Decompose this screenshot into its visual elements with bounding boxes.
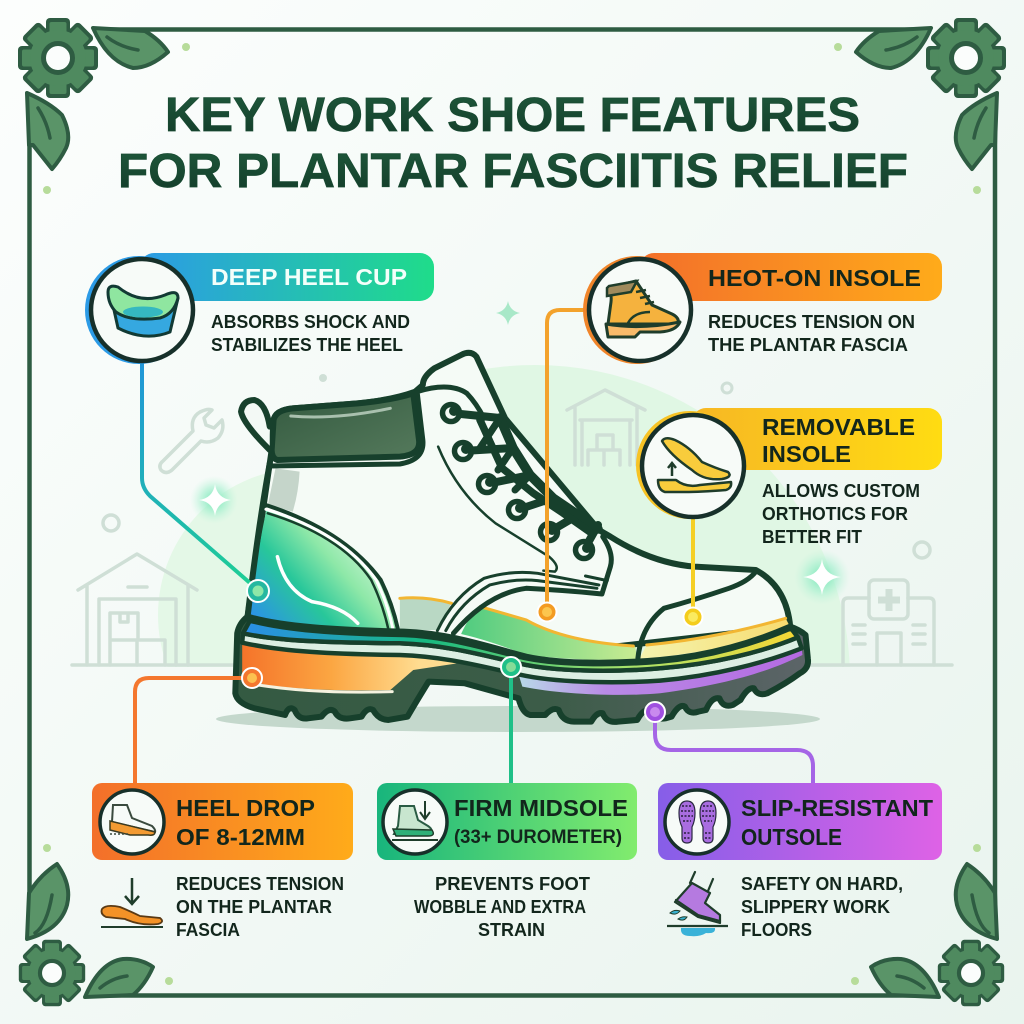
description: heel drop: ON THE PLANTAR bbox=[176, 897, 332, 917]
callout: slip-resistant outsole: OUTSOLE bbox=[741, 824, 842, 850]
eyelets bbox=[442, 404, 592, 558]
purple sole stripe bbox=[519, 648, 802, 695]
title bbox=[118, 89, 908, 198]
callout: removable insole: BETTER FIT bbox=[762, 527, 862, 547]
boot illustration bbox=[235, 353, 808, 722]
callout: removable insole: ORTHOTICS FOR bbox=[762, 504, 908, 524]
description: heel drop: FASCIA bbox=[176, 920, 240, 940]
sparkles bbox=[190, 301, 850, 605]
description: firm midsole: STRAIN bbox=[478, 920, 545, 940]
icon: hospital bbox=[843, 580, 934, 665]
callout: slip-resistant outsole bbox=[658, 783, 942, 860]
description: slip-resistant outsole: SAFETY ON HARD, bbox=[741, 874, 903, 894]
heel wedge orange bbox=[242, 643, 469, 690]
midfoot coloured panels bbox=[400, 598, 452, 630]
callout: heel drop: OF 8-12MM bbox=[176, 824, 305, 850]
connector: outsole bbox=[655, 712, 813, 784]
title: KEY WORK SHOE FEATURES bbox=[165, 89, 860, 142]
coloured midsole band bbox=[243, 621, 798, 671]
collar bbox=[272, 393, 419, 460]
icon: wrench bbox=[160, 409, 223, 472]
callout: deep heel cup: STABILIZES THE HEEL bbox=[211, 335, 403, 355]
grey lining strip bbox=[268, 468, 300, 512]
connector: firm midsole bbox=[509, 667, 513, 784]
callout: firm midsole: (33+ DUROMETER) bbox=[454, 827, 622, 848]
pull tab bbox=[241, 400, 270, 450]
description: slip-resistant outsole: FLOORS bbox=[741, 920, 812, 940]
callout: slip-resistant outsole: SLIP-RESISTANT bbox=[741, 795, 933, 821]
connector: heel drop bbox=[135, 678, 252, 784]
callout: heot-on insole: REDUCES TENSION ON bbox=[708, 312, 915, 332]
corner ornament: bottom-left gear bbox=[19, 940, 85, 1006]
corner ornament: bottom-right gear bbox=[938, 940, 1004, 1006]
inner panel lines bbox=[438, 447, 557, 572]
icon: heel cup bbox=[91, 259, 193, 361]
ground shadow under boot bbox=[216, 706, 820, 732]
description: firm midsole bbox=[414, 874, 590, 940]
callout: removable insole: ALLOWS CUSTOM bbox=[762, 481, 920, 501]
connector: removable insole bbox=[691, 518, 695, 617]
background glow: green blobs behind boot bbox=[158, 365, 850, 663]
icon: warehouse center bbox=[567, 390, 645, 465]
corner ornament: top-right gear bbox=[926, 18, 1006, 98]
callout: heot-on insole: THE PLANTAR FASCIA bbox=[708, 335, 908, 355]
icon: firm midsole shoe bbox=[383, 790, 447, 854]
white welt band bbox=[242, 633, 802, 682]
connector: heel-on insole bbox=[547, 310, 592, 612]
ground lines bbox=[72, 663, 952, 667]
icon: insole lift bbox=[642, 415, 744, 517]
laces bbox=[451, 413, 598, 550]
toe cap bbox=[638, 572, 756, 658]
callout: heot-on insole: HEOT-ON INSOLE bbox=[708, 265, 921, 291]
callout: removable insole: INSOLE bbox=[762, 441, 851, 467]
icon: warehouse left bbox=[78, 554, 197, 665]
description: heel drop: REDUCES TENSION bbox=[176, 874, 344, 894]
outsole bbox=[235, 617, 808, 722]
connector dots bbox=[242, 580, 702, 722]
callout: heel drop bbox=[92, 783, 353, 860]
callout: heot-on insole bbox=[583, 253, 942, 364]
callout: firm midsole: FIRM MIDSOLE bbox=[454, 795, 628, 821]
description: slip-resistant outsole bbox=[667, 872, 903, 940]
connector: deep heel cup bbox=[142, 360, 258, 590]
callout: deep heel cup: DEEP HEEL CUP bbox=[211, 264, 407, 290]
icon: shoe soles bbox=[665, 790, 729, 854]
description: firm midsole: PREVENTS FOOT bbox=[435, 874, 590, 894]
icon: heel drop shoe bbox=[100, 790, 164, 854]
icon: slipping boot bbox=[667, 872, 728, 936]
icon: boot bbox=[589, 259, 691, 361]
callout: heel drop: HEEL DROP bbox=[176, 795, 315, 821]
faded background icons bbox=[72, 390, 952, 665]
description: slip-resistant outsole: SLIPPERY WORK bbox=[741, 897, 890, 917]
callout: deep heel cup: ABSORBS SHOCK AND bbox=[211, 312, 410, 332]
callout: deep heel cup bbox=[85, 253, 434, 364]
callout: removable insole bbox=[636, 408, 942, 547]
icon: insole with down arrow bbox=[101, 878, 163, 927]
heel counter bbox=[249, 508, 398, 632]
description: heel drop bbox=[101, 874, 344, 940]
description: firm midsole: WOBBLE AND EXTRA bbox=[414, 897, 586, 917]
boot upper bbox=[248, 353, 790, 657]
callout: firm midsole bbox=[377, 783, 637, 860]
callout: removable insole: REMOVABLE bbox=[762, 414, 915, 440]
title: FOR PLANTAR FASCIITIS RELIEF bbox=[118, 145, 908, 198]
corner ornament: top-left gear bbox=[18, 18, 98, 98]
